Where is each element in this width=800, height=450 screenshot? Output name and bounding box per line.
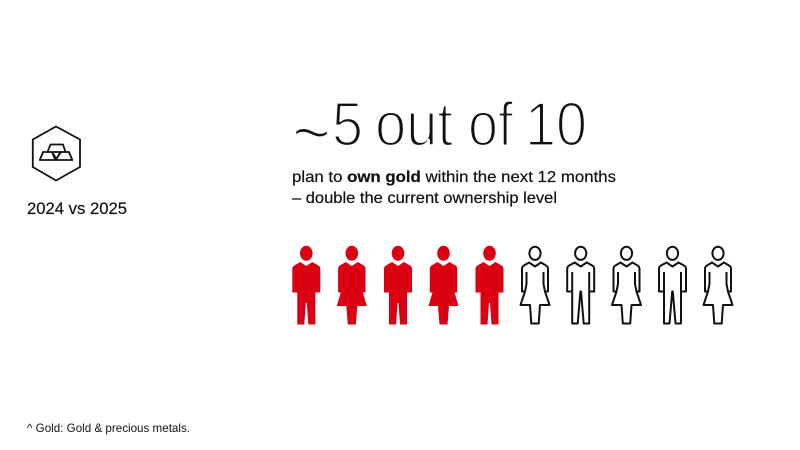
person 8 outline xyxy=(612,247,641,324)
subtitle text: – double the current ownership level xyxy=(292,190,557,207)
heading: ~5 out of 10: ~ xyxy=(292,85,331,179)
person 4 red xyxy=(428,246,458,324)
subtitle text: plan to own gold within the next 12 months xyxy=(292,169,616,186)
label: 2024 vs 2025: 2024 vs 2025 xyxy=(27,200,127,218)
heading: ~5 out of 10 xyxy=(292,85,587,179)
icon: gold bars in hexagon xyxy=(33,126,80,180)
footnote: ^ Gold: Gold & precious metals. xyxy=(27,422,190,435)
heading: ~5 out of 10: 5 xyxy=(332,90,363,160)
person 10 outline xyxy=(704,247,732,324)
person 1 red xyxy=(292,246,320,324)
person 6 outline xyxy=(520,247,550,324)
person 5 red xyxy=(476,246,504,324)
heading: ~5 out of 10: of xyxy=(468,90,514,160)
person 2 red xyxy=(337,246,367,324)
person 7 outline xyxy=(567,247,594,324)
pictogram: 5 of 10 people highlighted xyxy=(292,246,732,324)
subtitle text xyxy=(292,169,616,207)
person 3 red xyxy=(384,246,412,324)
person 9 outline xyxy=(659,247,686,324)
heading: ~5 out of 10: out xyxy=(375,90,453,160)
heading: ~5 out of 10: 10 xyxy=(525,90,587,160)
